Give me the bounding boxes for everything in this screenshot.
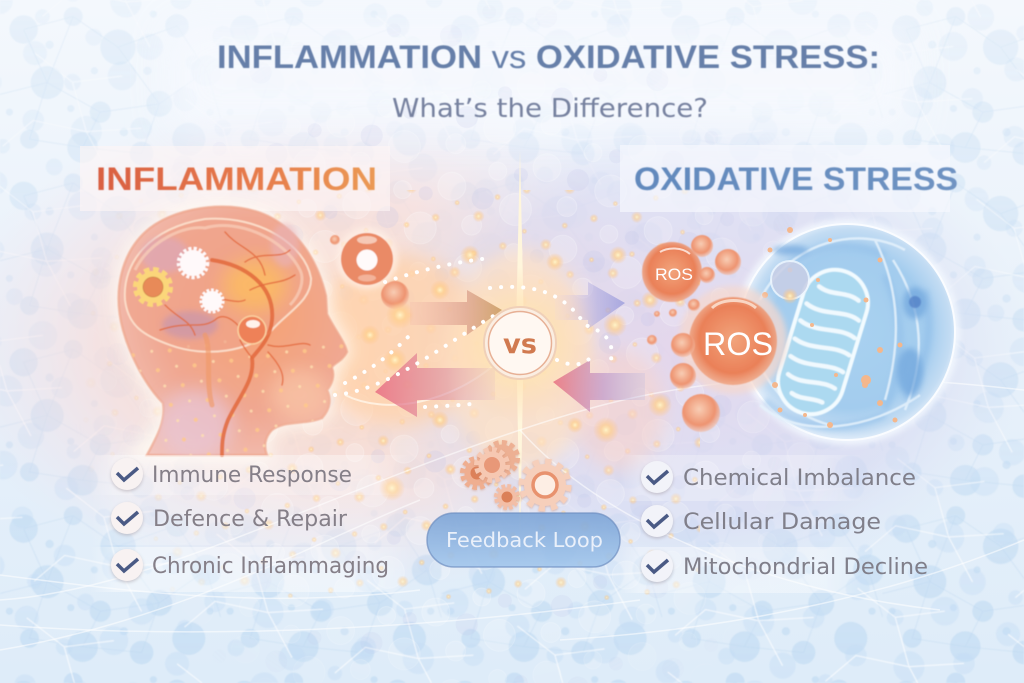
item: chronic inflammaging <box>111 549 389 581</box>
heading: inflammation: INFLAMMATION <box>96 161 377 197</box>
large ROS bubble <box>679 286 787 394</box>
large ROS bubble: ROS <box>703 326 773 362</box>
small ROS bubble <box>642 242 702 302</box>
ROS bubbles <box>642 235 787 432</box>
item: mitochondrial decline: Mitochondrial Decline <box>683 555 928 580</box>
arrow: upper left pointing right <box>410 290 502 335</box>
cell speckles <box>762 227 902 428</box>
gear: middle <box>476 450 508 480</box>
translucent sphere in front of face <box>345 360 500 405</box>
feedback loop pill <box>427 513 620 567</box>
heading: oxidative stress <box>620 145 958 212</box>
vs badge: vs <box>503 329 537 360</box>
item: cellular damage <box>641 505 881 537</box>
item: defence and repair <box>111 502 348 534</box>
vs badge <box>484 307 556 379</box>
arrow: upper right pointing right <box>555 282 625 329</box>
arrow: lower right pointing left <box>553 360 645 412</box>
illustration: human head with brain <box>115 207 355 461</box>
gear: small <box>496 486 518 508</box>
item: chemical imbalance: Chemical Imbalance <box>683 466 916 491</box>
small ROS beads <box>647 235 741 432</box>
subtitle: What’s the Difference? <box>392 94 708 124</box>
gear: back left <box>462 458 492 488</box>
item: chronic inflammaging: Chronic Inflammaging <box>152 554 389 579</box>
item: mitochondrial decline <box>641 550 928 582</box>
title <box>217 39 880 124</box>
sparkle particles <box>360 245 672 501</box>
item: immune response <box>111 458 352 490</box>
inflamed gear <box>136 270 170 304</box>
gear: large <box>522 462 568 508</box>
illustration: cell with mitochondrion <box>734 219 960 445</box>
mitochondrion <box>770 262 876 422</box>
nerve branches <box>160 232 310 455</box>
glowing bead in brain <box>238 316 266 344</box>
white cell clusters <box>178 248 223 312</box>
list: oxidative stress <box>620 455 928 593</box>
title: INFLAMMATION vs OXIDATIVE STRESS: <box>217 39 880 75</box>
dotted flow paths <box>335 258 612 407</box>
inflamed cell <box>330 227 409 309</box>
item: chemical imbalance <box>641 461 916 493</box>
brain <box>125 219 311 352</box>
gear: back top <box>486 442 518 474</box>
list: inflammation <box>90 455 410 592</box>
item: defence and repair: Defence & Repair <box>153 507 348 532</box>
small vesicle <box>771 261 809 304</box>
small ROS bubble: ROS <box>655 265 693 284</box>
central vertical light beam <box>442 150 598 545</box>
heading: inflammation <box>80 146 390 211</box>
thin flowing light curves <box>0 378 1024 650</box>
warm glow behind centre <box>315 250 665 470</box>
item: immune response: Immune Response <box>152 463 352 488</box>
item: cellular damage: Cellular Damage <box>683 510 881 535</box>
feedback gears <box>462 442 568 508</box>
arrow: lower left pointing left <box>375 353 495 417</box>
heading: oxidative stress: OXIDATIVE STRESS <box>634 161 958 197</box>
feedback loop pill: Feedback Loop <box>446 528 603 552</box>
